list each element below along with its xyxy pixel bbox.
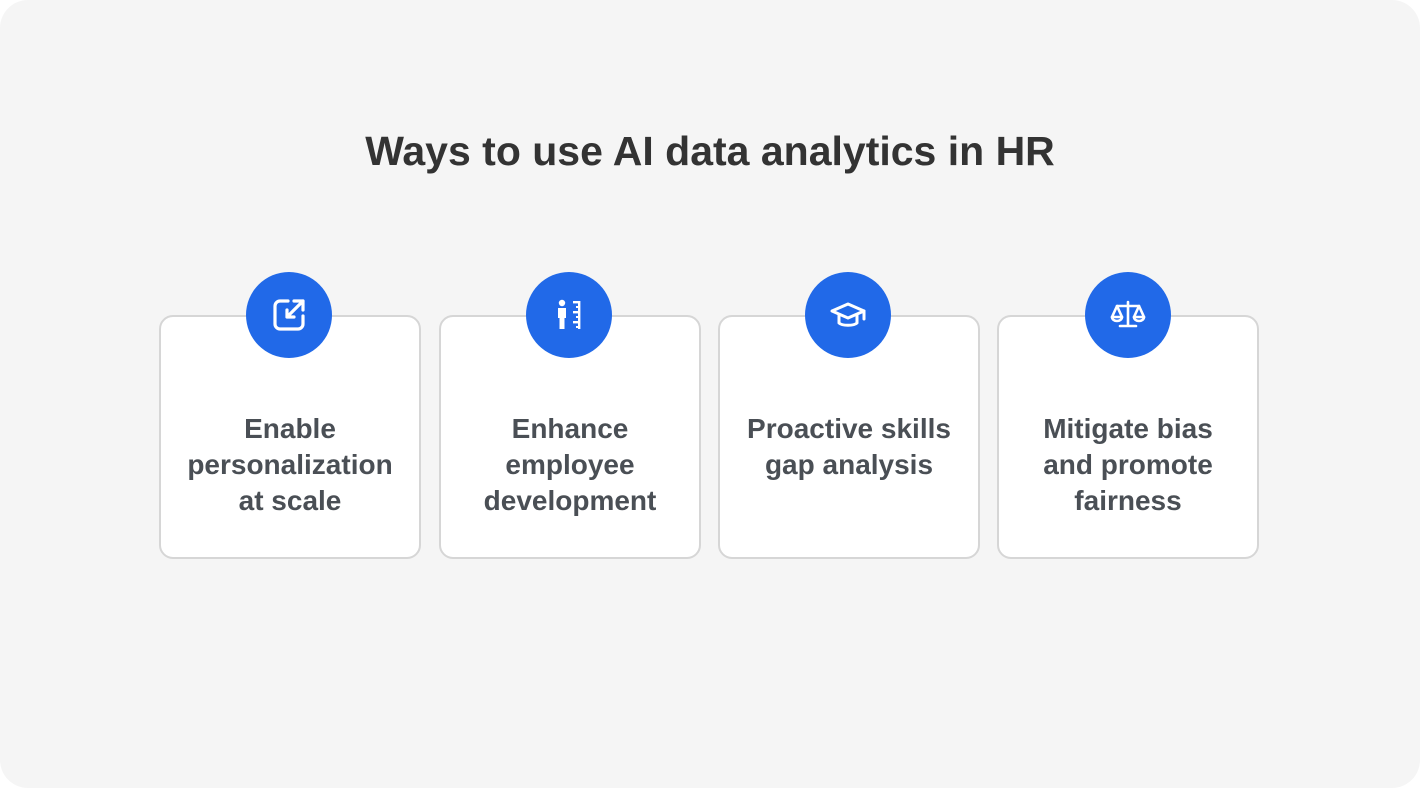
card: personalization: personalization [187,449,393,480]
title: Ways to use AI data analytics in HR [365,128,1055,174]
card: development: Enhance [512,413,628,444]
card: personalization: at scale [239,485,341,516]
card: development: development [484,485,656,516]
card: development [439,315,701,559]
icon: graduation cap [805,272,891,358]
card: bias [997,315,1259,559]
icon: expand [246,272,332,358]
card: skills gap: Proactive skills [747,413,951,444]
icon: person with ruler [526,272,612,358]
icon: scales [1085,272,1171,358]
card: bias: fairness [1074,485,1182,516]
card: skills gap: gap analysis [765,449,933,480]
card: bias: and promote [1043,449,1213,480]
card: development: employee [505,449,635,480]
card: bias: Mitigate bias [1043,413,1213,444]
card: skills gap [718,315,980,559]
card: personalization: Enable [244,413,336,444]
card: personalization [159,315,421,559]
